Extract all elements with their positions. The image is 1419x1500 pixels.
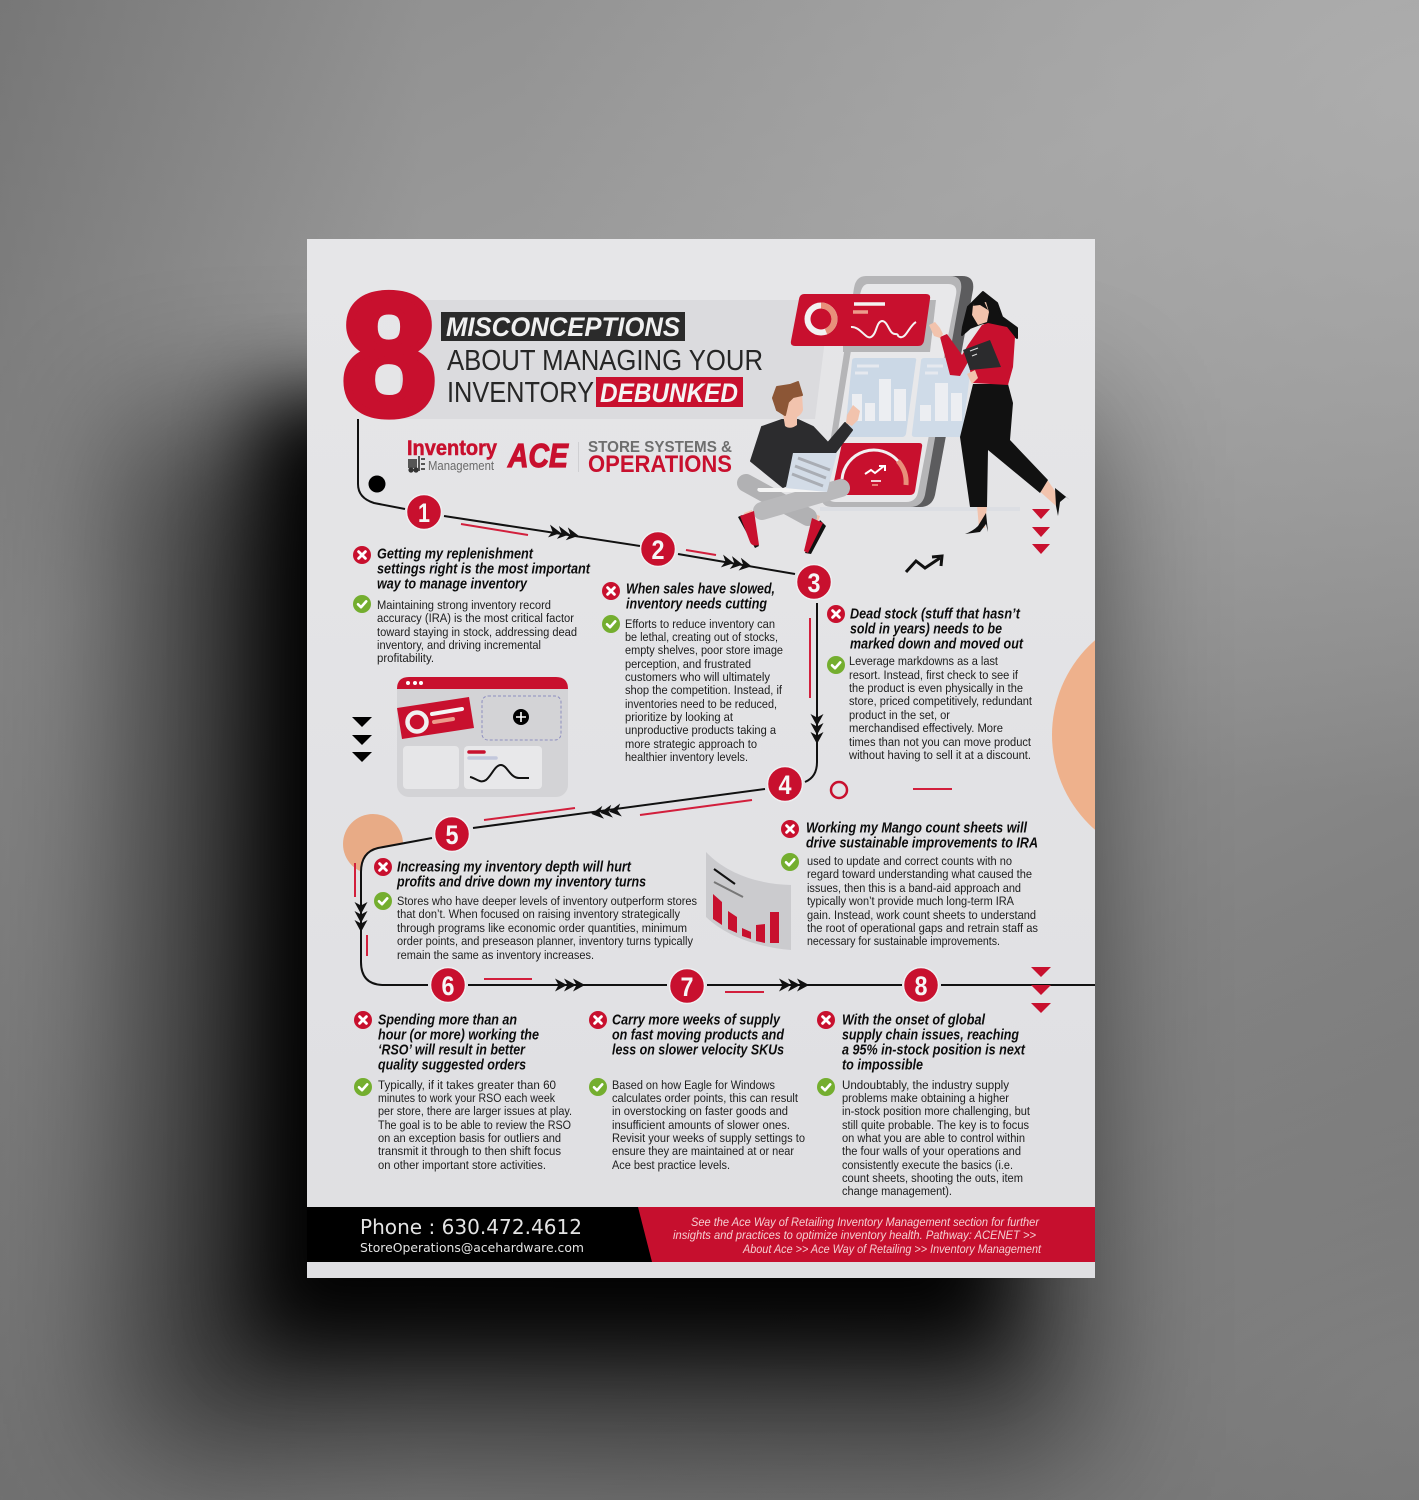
misconception 5: order points, and preseason planner, inventory turns typically: [397, 934, 694, 948]
misconception 1: [353, 546, 591, 665]
misconception 7: less on slower velocity SKUs: [612, 1042, 784, 1058]
misconception 6: on other important store activities.: [378, 1158, 546, 1172]
misconception 4: Working my Mango count sheets will: [806, 820, 1028, 836]
big number 8: 8: [342, 259, 436, 451]
title: DEBUNKED: [600, 378, 738, 408]
misconception 8: the four walls of your operations and: [842, 1144, 1021, 1158]
title: ABOUT MANAGING YOUR: [447, 345, 763, 377]
misconception 2: shop the competition. Instead, if: [625, 683, 782, 697]
misconception 1: inventory, and driving incremental: [377, 638, 541, 652]
logos row: Management: [428, 459, 494, 473]
misconception 5: profits and drive down my inventory turns: [396, 874, 646, 890]
footer: red call-out: [638, 1207, 1095, 1262]
footer: contact bar: Phone : 630.472.4612: [360, 1215, 582, 1239]
misconception 6: Typically, if it takes greater than 60: [378, 1078, 556, 1092]
misconception 6: minutes to work your RSO each week: [378, 1091, 556, 1105]
title: INVENTORY: [447, 377, 594, 409]
illustration: standing woman with clipboard: [929, 292, 1070, 534]
misconception 4: gain. Instead, work count sheets to understand: [807, 908, 1036, 922]
misconception 7: Revisit your weeks of supply settings to: [612, 1131, 805, 1145]
triangle stacks: [352, 509, 1051, 1013]
misconception 8: change management).: [842, 1184, 952, 1198]
misconception 8: a 95% in-stock position is next: [842, 1042, 1026, 1058]
misconception 2: Efforts to reduce inventory can: [625, 617, 775, 631]
title: [441, 312, 763, 409]
illustration: phone with dashboards: [791, 276, 1020, 509]
misconception 2: customers who will ultimately: [625, 670, 771, 684]
misconception 3: store, priced competitively, redundant: [849, 694, 1032, 708]
icon: dashboard window: [397, 677, 568, 797]
misconception 8: problems make obtaining a higher: [842, 1091, 1009, 1105]
red accent dashes: [355, 524, 952, 992]
misconception 2: more strategic approach to: [625, 737, 757, 751]
misconception 3: marked down and moved out: [850, 636, 1024, 652]
misconception 7: Based on how Eagle for Windows: [612, 1078, 775, 1092]
misconception 5: [374, 858, 697, 962]
step number badges: 4: [778, 770, 792, 800]
misconception 5: Stores who have deeper levels of inventory outperform stores: [397, 894, 697, 908]
misconception 4: issues, then this is a band-aid approach and: [807, 881, 1021, 895]
misconception 2: be lethal, creating out of stocks,: [625, 630, 778, 644]
misconception 8: to impossible: [842, 1058, 923, 1074]
misconception 3: Leverage markdowns as a last: [849, 654, 998, 668]
misconception 2: prioritize by looking at: [625, 710, 733, 724]
misconception 2: inventories need to be reduced,: [625, 697, 777, 711]
misconception 4: used to update and correct counts with no: [807, 854, 1012, 868]
logos row: STORE SYSTEMS &: [588, 439, 732, 456]
paper sheet: [307, 239, 1095, 1278]
misconception 1: settings right is the most important: [377, 562, 591, 578]
misconception 3: without having to sell it at a discount.: [848, 748, 1031, 762]
logos row: [407, 437, 732, 478]
misconception 3: merchandised effectively. More: [849, 721, 1003, 735]
misconception 4: regard toward understanding what caused the: [807, 867, 1032, 881]
misconception 8: With the onset of global: [842, 1012, 986, 1028]
footer: contact bar: [307, 1207, 652, 1262]
misconception 8: Undoubtably, the industry supply: [842, 1078, 1010, 1092]
misconception 3: times than not you can move product: [849, 735, 1031, 749]
decorative dot and ring: [368, 476, 847, 798]
misconception 1: Getting my replenishment: [377, 546, 534, 562]
misconception 1: Maintaining strong inventory record: [377, 598, 551, 612]
misconception 5: that don’t. When focused on raising inventory strategically: [397, 907, 681, 921]
step number badges: 2: [652, 535, 664, 565]
misconception 4: necessary for sustainable improvements.: [807, 934, 1000, 948]
misconception 1: toward staying in stock, addressing dead: [377, 625, 577, 639]
misconception 6: on an exception basis for outliers and: [378, 1131, 561, 1145]
misconception 3: product in the set, or: [849, 708, 950, 722]
misconception 5: remain the same as inventory increases.: [397, 948, 594, 962]
misconception 4: drive sustainable improvements to IRA: [806, 836, 1038, 852]
misconception 3: sold in years) needs to be: [850, 622, 1002, 638]
route line through numbered steps: [358, 419, 1095, 985]
misconception 1: way to manage inventory: [377, 576, 528, 592]
misconception 3: the product is even physically in the: [849, 681, 1023, 695]
footer: red call-out: See the Ace Way of Retailing Inventory Management section for further: [691, 1215, 1040, 1229]
misconception 6: [354, 1011, 572, 1172]
step number badges: 5: [446, 820, 458, 850]
misconception 8: count sheets, shooting the outs, item: [842, 1171, 1023, 1185]
illustration: seated man with laptop: [738, 382, 860, 554]
misconception 6: ‘RSO’ will result in better: [378, 1042, 526, 1058]
misconception 8: supply chain issues, reaching: [842, 1028, 1019, 1044]
step number badges: 1: [418, 498, 430, 528]
misconception 8: on what you are able to control within: [842, 1131, 1025, 1145]
misconception 4: the root of operational gaps and retrain staff as: [807, 921, 1038, 935]
misconception 7: insufficient amounts of slower ones.: [612, 1118, 790, 1132]
misconception 7: [589, 1011, 805, 1172]
misconception 8: consistently execute the basics (i.e.: [842, 1158, 1013, 1172]
misconception 8: [817, 1011, 1030, 1198]
misconception 2: perception, and frustrated: [625, 657, 751, 671]
misconception 5: Increasing my inventory depth will hurt: [397, 860, 632, 876]
misconception 2: healthier inventory levels.: [625, 750, 748, 764]
misconception 5: through programs like economic order quantities, minimum: [397, 921, 687, 935]
step number badges: 6: [442, 971, 454, 1001]
logos row: OPERATIONS: [588, 451, 732, 478]
misconception 6: Spending more than an: [378, 1012, 517, 1028]
misconception 2: [602, 582, 783, 764]
misconception 6: hour (or more) working the: [378, 1028, 539, 1044]
logos row: Inventory: [407, 437, 497, 460]
misconception 4: typically won’t provide much long-term IRA: [807, 894, 1015, 908]
step number badges: 3: [808, 568, 820, 598]
misconception 3: Dead stock (stuff that hasn’t: [850, 606, 1021, 622]
arrowheads on route: [354, 525, 824, 992]
misconception 7: calculates order points, this can result: [612, 1091, 798, 1105]
misconception 7: Carry more weeks of supply: [612, 1012, 781, 1028]
misconception 8: still quite probable. The key is to focus: [842, 1118, 1029, 1132]
step number badges: 8: [914, 971, 928, 1001]
misconception 7: on fast moving products and: [612, 1028, 785, 1044]
misconception 6: per store, there are larger issues at play.: [378, 1104, 572, 1118]
logos row: ACE: [507, 437, 569, 474]
misconception 7: in overstocking on faster goods and: [612, 1104, 788, 1118]
misconception 2: inventory needs cutting: [626, 596, 767, 612]
misconception 4: [781, 820, 1038, 948]
title: MISCONCEPTIONS: [446, 312, 680, 342]
misconception 6: quality suggested orders: [378, 1058, 526, 1074]
icon: curved bar chart panel: [706, 852, 791, 950]
misconception 7: Ace best practice levels.: [612, 1158, 730, 1172]
title band: [400, 300, 830, 419]
misconception 2: empty shelves, poor store image: [625, 643, 783, 657]
misconception 1: profitability.: [377, 651, 434, 665]
misconception 2: unproductive products taking a: [625, 723, 776, 737]
misconception 2: When sales have slowed,: [626, 582, 775, 598]
footer: contact bar: StoreOperations@acehardware.com: [360, 1240, 584, 1255]
decorative peach circles: [343, 640, 1095, 871]
misconception 6: The goal is to be able to review the RSO: [378, 1118, 571, 1132]
misconception 6: transmit it through to then shift focus: [378, 1144, 561, 1158]
misconception 7: ensure they are maintained at or near: [612, 1144, 794, 1158]
misconception 3: resort. Instead, first check to see if: [849, 668, 1018, 682]
icon: trend arrow: [906, 556, 942, 572]
misconception 1: accuracy (IRA) is the most critical factor: [377, 611, 574, 625]
misconception 3: [827, 605, 1032, 762]
footer: red call-out: About Ace >> Ace Way of Retailing >> Inventory Management: [742, 1242, 1042, 1256]
footer: red call-out: insights and practices to optimize inventory health. Pathway: ACENET >>: [673, 1228, 1036, 1242]
step number badges: [406, 494, 938, 1004]
misconception 8: in-stock position more challenging, but: [842, 1104, 1030, 1118]
step number badges: 7: [680, 972, 694, 1002]
